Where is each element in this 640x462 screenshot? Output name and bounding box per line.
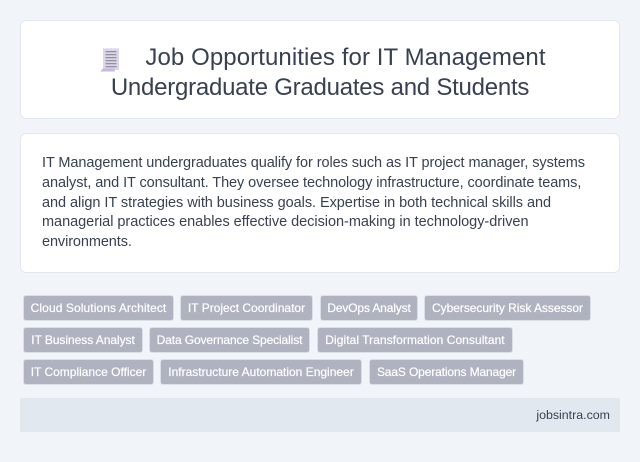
tag: Data Governance Specialist bbox=[157, 333, 302, 347]
tag bbox=[180, 295, 313, 321]
description text: and align IT strategies with business goals. Expertise in both technical skills and bbox=[42, 195, 551, 211]
description text bbox=[42, 155, 585, 250]
tag bbox=[320, 295, 418, 321]
title bbox=[111, 44, 546, 101]
tag bbox=[317, 327, 513, 353]
tag: Cybersecurity Risk Assessor bbox=[432, 301, 583, 315]
tag: Digital Transformation Consultant bbox=[325, 333, 505, 347]
tag: Infrastructure Automation Engineer bbox=[168, 365, 354, 379]
tag: IT Business Analyst bbox=[31, 333, 135, 347]
panel: header bbox=[20, 20, 620, 119]
tag: IT Compliance Officer bbox=[31, 365, 146, 379]
title: Job Opportunities for IT Management bbox=[145, 44, 546, 71]
tag group: job titles bbox=[23, 295, 591, 385]
title: Undergraduate Graduates and Students bbox=[111, 74, 529, 101]
description text: environments. bbox=[42, 234, 132, 250]
description text: IT Management undergraduates qualify for roles such as IT project manager, systems bbox=[42, 155, 585, 171]
tag: IT Project Coordinator bbox=[188, 301, 305, 315]
description text: analyst, and IT consultant. They oversee technology infrastructure, coordinate teams, bbox=[42, 175, 581, 191]
tag: Cloud Solutions Architect bbox=[31, 301, 166, 315]
tag bbox=[369, 359, 524, 385]
tag bbox=[23, 327, 143, 353]
footer bar bbox=[20, 398, 620, 432]
tag: DevOps Analyst bbox=[327, 301, 411, 315]
panel: description bbox=[20, 133, 620, 273]
tag bbox=[23, 295, 174, 321]
description text: managerial practices enables effective decision-making in technology-driven bbox=[42, 214, 528, 230]
icon: document scroll bbox=[100, 48, 119, 72]
tag bbox=[149, 327, 310, 353]
tag bbox=[23, 359, 154, 385]
footer source text: jobsintra.com bbox=[536, 408, 610, 422]
tag bbox=[424, 295, 591, 321]
tag bbox=[160, 359, 362, 385]
tag: SaaS Operations Manager bbox=[377, 365, 516, 379]
